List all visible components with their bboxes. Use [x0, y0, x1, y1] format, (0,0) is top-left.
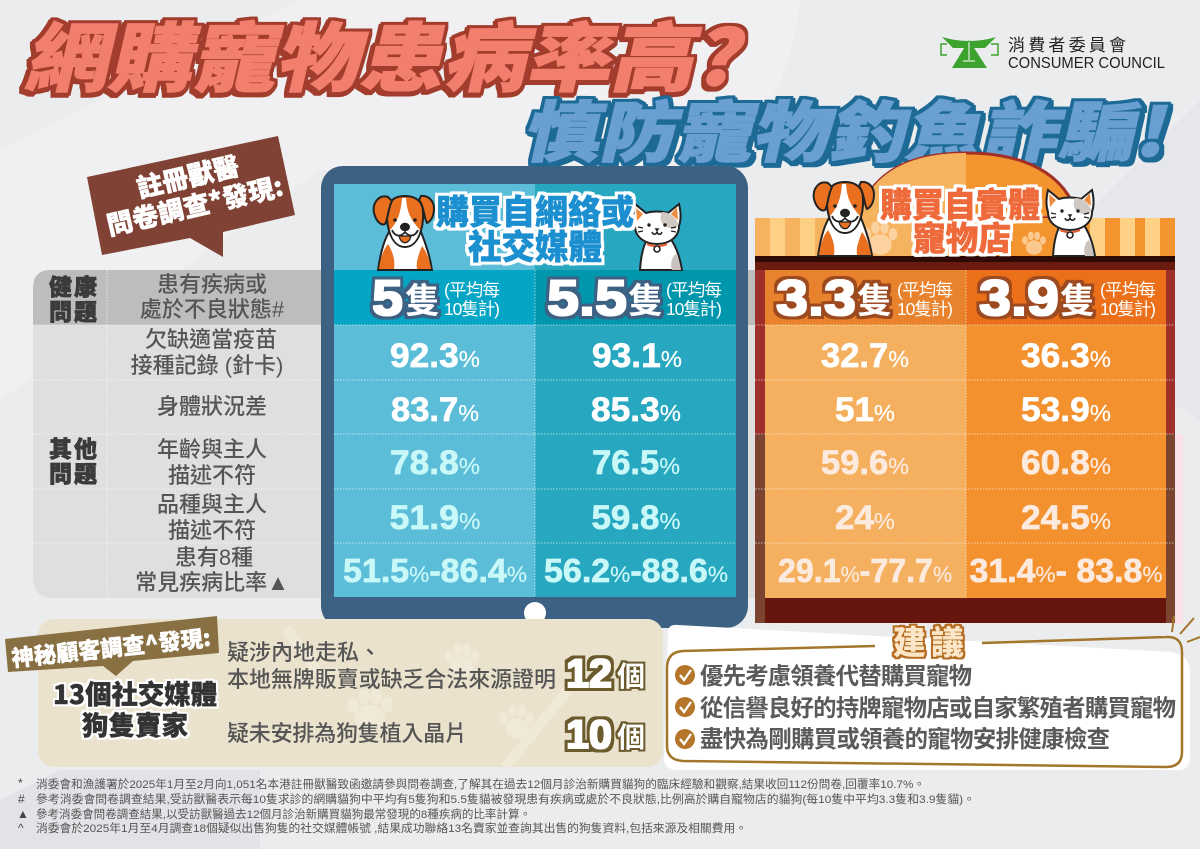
shop frame	[755, 256, 1175, 623]
row label: breed mismatch: 描述不符	[168, 518, 256, 543]
tablet panel	[321, 166, 748, 628]
callout: registered vets survey	[87, 136, 295, 257]
number: 10	[566, 713, 645, 757]
tablet heading: 購買自網絡或	[436, 185, 634, 234]
header count: 3.9: (平均每	[1100, 280, 1156, 300]
data column: shop cats: 53.9%	[1021, 391, 1111, 429]
logo text	[1008, 36, 1165, 72]
heading: health problems	[49, 268, 99, 327]
suggestion 2: 從信譽良好的持牌寵物店或自家繁殖者購買寵物	[700, 695, 1176, 721]
text: 13 sellers: 狗隻賣家	[82, 704, 188, 743]
row label: age mismatch: 年齡與主人	[157, 437, 267, 462]
header count: 5.5: 隻	[628, 273, 663, 324]
footnote #: #	[18, 792, 25, 806]
text: finding 1: 本地無牌販賣或缺乏合法來源證明	[227, 667, 556, 692]
tablet heading: 社交媒體	[468, 220, 602, 269]
header count: 3.3	[776, 270, 953, 326]
data column: online cats: 59.8%	[592, 499, 680, 537]
panel: mystery shopper	[5, 616, 663, 767]
header count: 3.3: 3.3	[776, 270, 856, 326]
shop heading: 寵物店	[913, 212, 1011, 260]
row label: vaccination: 接種記錄 (針卡)	[131, 353, 283, 378]
header count: 3.9: 隻	[1060, 273, 1095, 324]
text: finding 1: 疑涉內地走私、	[227, 640, 381, 665]
footnote *: *	[18, 776, 23, 790]
data column: online cats: 93.1%	[592, 337, 682, 375]
rays	[1172, 616, 1200, 642]
tablet screen	[334, 184, 736, 597]
number: 12: 個	[617, 655, 645, 695]
footnote *: 消委會和漁護署於2025年1月至2月向1,051名本港註冊獸醫致函邀請參與問卷調查,了解其在過去12個月診治新購買貓狗的臨床經驗和觀察,結果收回112份問卷,回覆率10.7%。	[36, 777, 925, 791]
header count: 3.9	[979, 270, 1156, 326]
callout: mystery shopper survey: 神秘顧客調查^發現:	[10, 621, 212, 673]
data column: online dogs: 92.3%	[390, 337, 480, 375]
header count: 5: 10隻計)	[444, 299, 500, 319]
illustration: tablet cat	[634, 204, 682, 270]
data column: shop cats	[970, 337, 1162, 589]
text: 13 sellers: 13個社交媒體	[53, 673, 217, 712]
suggestion 3: 盡快為剛購買或領養的寵物安排健康檢查	[700, 725, 1110, 752]
row label: breed mismatch: 品種與主人	[157, 492, 267, 517]
data column: online cats: 56.2%-88.6%	[544, 552, 728, 589]
table row labels panel	[33, 268, 755, 598]
header count: 5: (平均每	[444, 280, 500, 300]
shop awning	[755, 218, 1175, 256]
heading: health problems: 問題	[49, 293, 99, 327]
header count: 3.9: 3.9	[979, 270, 1059, 326]
illustration: tablet dog	[374, 196, 434, 270]
logo text: CONSUMER COUNCIL	[1008, 55, 1165, 72]
shop arch	[858, 153, 1078, 218]
data column: shop dogs: 32.7%	[821, 337, 909, 375]
data column: shop dogs	[778, 337, 952, 589]
data column: online cats	[544, 337, 728, 589]
title line 1: 網購寵物患病率高?	[19, 0, 758, 107]
heading: other problems	[49, 430, 99, 489]
logo: Consumer Council	[941, 36, 1165, 72]
illustration: shop dog	[814, 182, 874, 256]
row label: eight diseases: 患有8種	[175, 545, 253, 570]
number: 10: 個	[617, 716, 645, 756]
footnote caret: ^	[18, 821, 24, 835]
tablet heading	[436, 185, 634, 269]
row label: eight diseases	[135, 545, 289, 595]
text: finding 1	[227, 640, 556, 692]
suggestion 1: 優先考慮領養代替購買寵物	[700, 663, 972, 689]
icon: scales	[941, 37, 998, 68]
header count: 5.5: 10隻計)	[666, 299, 722, 319]
data column: online dogs: 51.9%	[390, 499, 480, 537]
callout: registered vets survey: 問卷調查*發現:	[103, 166, 286, 243]
callout: registered vets survey: 註冊獸醫	[133, 146, 242, 205]
data column: online dogs: 83.7%	[391, 391, 479, 429]
data column: online cats: 85.3%	[591, 391, 681, 429]
footnote caret: 消委會於2025年1月至4月調查18個疑似出售狗隻的社交媒體帳號 ,結果成功聯絡13名賣家並查詢其出售的狗隻資料,包括來源及相關費用。	[36, 821, 747, 835]
suggestions border	[667, 637, 1182, 767]
row label: disease: 患有疾病或	[157, 272, 267, 297]
row label: eight diseases: 常見疾病比率▲	[135, 570, 289, 595]
data column: online dogs	[343, 337, 527, 589]
data column: online dogs: 51.5%-86.4%	[343, 552, 527, 589]
header count: 5: 隻	[405, 273, 440, 324]
header count: 5.5: 5.5	[547, 270, 627, 326]
number: 12: 12	[566, 652, 612, 696]
illustration: shop cat	[1046, 190, 1095, 256]
footnote triangle: 參考消委會問卷調查結果,以受訪獸醫過去12個月診治新購買貓狗最常發現的8種疾病的比率計算。	[36, 807, 531, 821]
header count: 5.5: (平均每	[666, 280, 722, 300]
data column: shop dogs: 24%	[835, 499, 895, 537]
header count: 3.3: 隻	[857, 273, 892, 324]
header count: 3.3: (平均每	[897, 280, 953, 300]
row label: age mismatch: 描述不符	[168, 463, 256, 488]
title line 2: 慎防寵物釣魚詐騙!	[517, 80, 1182, 176]
text: finding 2: 疑未安排為狗隻植入晶片	[227, 721, 467, 746]
data column: shop cats: 31.4%- 83.8%	[970, 552, 1162, 589]
heading: suggestions: 建議	[893, 616, 969, 664]
row separators	[33, 270, 1175, 598]
heading: other problems: 問題	[49, 455, 99, 489]
number: 10: 10	[566, 713, 612, 757]
header count: 5: 5	[372, 270, 403, 326]
header count: 3.9: 10隻計)	[1100, 299, 1156, 319]
data column: shop dogs: 51%	[835, 391, 895, 429]
row label: poor condition: 身體狀況差	[157, 394, 267, 419]
row label: vaccination	[131, 327, 283, 378]
heading: health problems: 健康	[49, 268, 99, 302]
data column: shop cats: 24.5%	[1021, 499, 1111, 537]
footnotes	[17, 776, 975, 835]
row label: breed mismatch	[157, 492, 267, 543]
footnote #: 參考消委會問卷調查結果,受訪獸醫表示每10隻求診的網購貓狗中平均有5隻狗和5.5隻貓被發現患有疾病或處於不良狀態,比例高於購自寵物店的貓狗(每10隻中平均3.3隻和3.9隻貓)。	[36, 792, 975, 806]
tablet home button	[524, 602, 546, 624]
shop heading	[880, 178, 1040, 260]
logo text: 消費者委員會	[1008, 36, 1126, 55]
header count: 3.3: 10隻計)	[897, 299, 953, 319]
shop columns	[765, 270, 1166, 598]
text: 13 sellers	[53, 673, 217, 743]
header count: 5	[372, 270, 500, 326]
header count: 5.5	[547, 270, 722, 326]
data column: shop cats: 36.3%	[1021, 337, 1111, 375]
number: 12	[566, 652, 645, 696]
data column: shop dogs: 59.6%	[821, 444, 909, 482]
row label: vaccination: 欠缺適當疫苗	[145, 327, 277, 352]
data column: shop dogs: 29.1%-77.7%	[778, 552, 952, 589]
decorative paws and bones	[164, 625, 598, 767]
pet shop panel	[755, 153, 1175, 623]
footnote triangle: ▲	[17, 807, 29, 821]
heading: other problems: 其他	[49, 430, 99, 464]
data column: shop cats: 60.8%	[1021, 444, 1111, 482]
shop heading: 購買自實體	[880, 178, 1040, 227]
data column: online dogs: 78.8%	[390, 444, 480, 482]
panel: suggestions	[664, 616, 1200, 770]
data column: online cats: 76.5%	[592, 444, 680, 482]
row label: disease	[140, 272, 285, 322]
row label: age mismatch	[157, 437, 267, 488]
row label: disease: 處於不良狀態#	[140, 297, 285, 322]
